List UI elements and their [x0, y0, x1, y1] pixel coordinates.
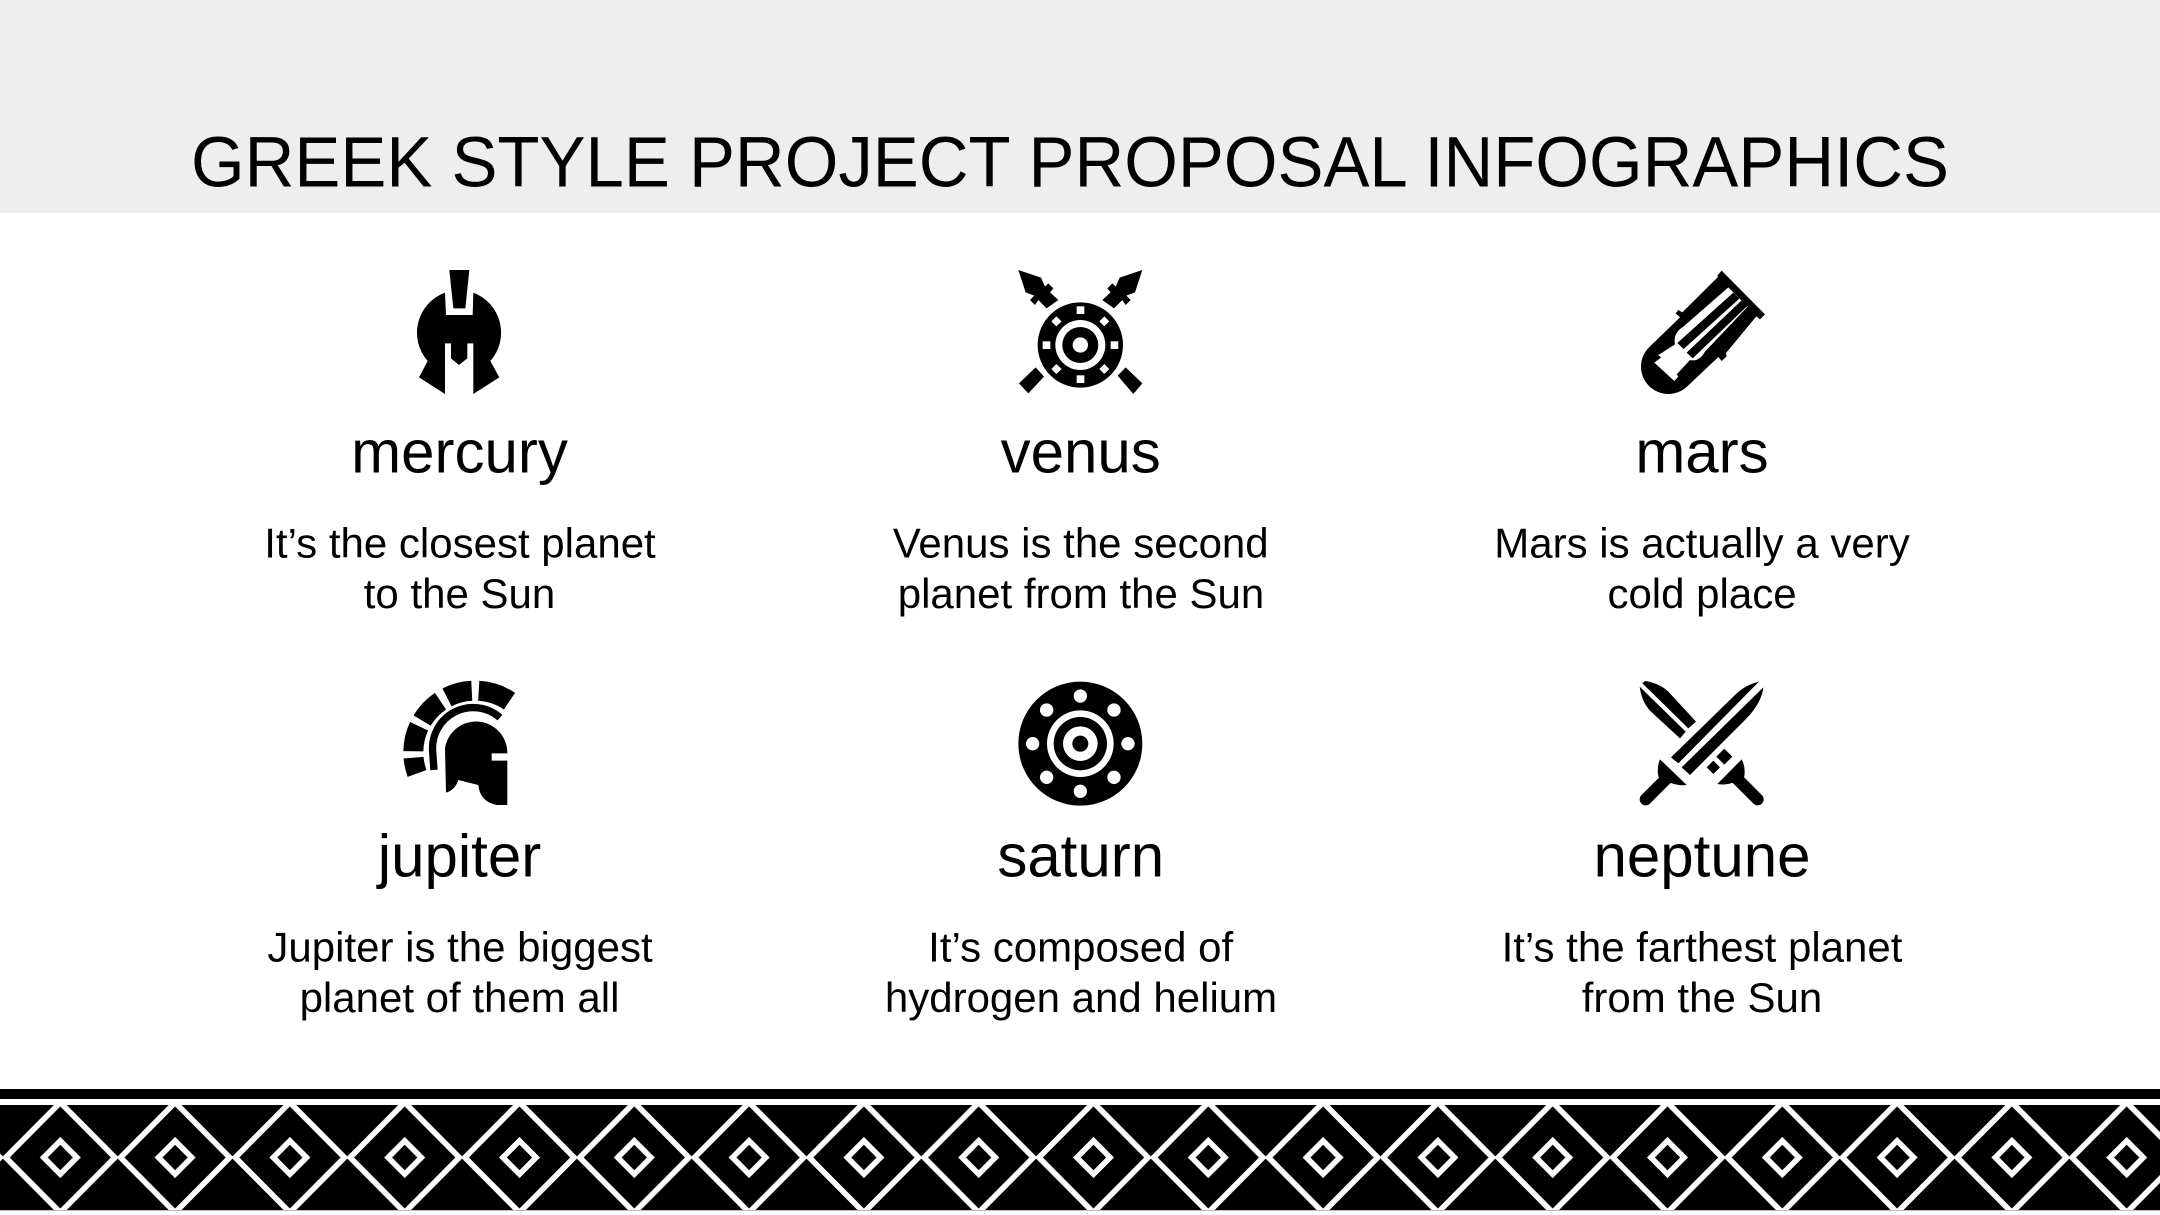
- description: venus: Venus is the second: [893, 520, 1269, 566]
- icon: crested helmet: [413, 691, 509, 805]
- panel: mercury: [264, 270, 656, 617]
- description: saturn: hydrogen and helium: [885, 974, 1277, 1021]
- heading: neptune: neptune: [1594, 822, 1810, 890]
- description: mars: cold place: [1607, 570, 1797, 617]
- heading: venus: venus: [1001, 418, 1161, 486]
- panel: venus: [893, 270, 1269, 617]
- description: saturn: It’s composed of: [928, 924, 1234, 970]
- heading: mercury: mercury: [351, 418, 568, 486]
- description: jupiter: Jupiter is the biggest: [267, 924, 653, 970]
- panel: neptune: [1502, 681, 1903, 1021]
- heading: mars: mars: [1635, 418, 1769, 486]
- icon: spartan helmet: [417, 270, 501, 394]
- description: neptune: from the Sun: [1582, 974, 1822, 1021]
- description: venus: planet from the Sun: [898, 570, 1264, 617]
- panel: saturn: [885, 682, 1277, 1021]
- description: mercury: to the Sun: [364, 570, 555, 617]
- icon: lyre: [1641, 271, 1765, 394]
- panel: mars: [1494, 271, 1910, 617]
- heading: jupiter: jupiter: [376, 822, 541, 890]
- icon: shield and spears: [1018, 270, 1142, 394]
- heading: saturn: saturn: [997, 822, 1164, 890]
- greek key border: [0, 1089, 2160, 1211]
- description: neptune: It’s the farthest planet: [1502, 924, 1903, 970]
- panel: jupiter: [267, 691, 653, 1021]
- description: mars: Mars is actually a very: [1494, 520, 1910, 566]
- title: GREEK STYLE PROJECT PROPOSAL INFOGRAPHICS: [191, 124, 1949, 202]
- icon: crossed swords: [1640, 681, 1763, 799]
- icon: round shield: [1018, 682, 1142, 806]
- description: jupiter: planet of them all: [300, 974, 619, 1021]
- description: mercury: It’s the closest planet: [264, 520, 656, 566]
- header band: [0, 0, 2160, 213]
